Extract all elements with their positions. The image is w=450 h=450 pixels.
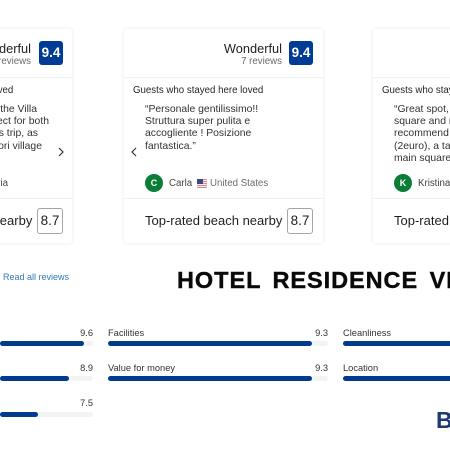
label: Cleanliness <box>343 328 391 338</box>
rating badge: 9.4 <box>292 45 310 60</box>
reviewer avatar <box>145 174 163 192</box>
reviewer avatar <box>394 174 412 192</box>
reviewer avatar: K <box>400 178 406 188</box>
panel: centre review card <box>124 29 323 243</box>
review quote <box>0 104 49 152</box>
score row: facilities <box>108 328 328 346</box>
next arrow <box>58 148 64 156</box>
panel: left review card <box>0 29 72 243</box>
bar <box>0 376 93 381</box>
review quote: accogliente ! Posizione <box>145 128 251 139</box>
score row: staff <box>0 328 93 346</box>
previous arrow <box>131 148 136 156</box>
panel: right review card <box>373 29 450 243</box>
review quote: “Personale gentilissimo!! <box>145 104 258 115</box>
beach score: 8.7 <box>291 213 309 228</box>
bar <box>343 376 450 381</box>
review quote: fantastica.” <box>145 141 196 152</box>
score row: location <box>343 363 450 381</box>
read all reviews link: Read all reviews <box>3 272 69 282</box>
bar <box>0 412 93 417</box>
beach nearby label: Top-rated beach nearby <box>145 213 282 228</box>
value: 7.5 <box>80 398 93 408</box>
icon: US flag <box>197 179 207 188</box>
label: Location <box>343 363 378 373</box>
guests heading: Guests who stayed here loved <box>133 85 263 96</box>
review quote: main square <box>394 153 450 164</box>
value: 9.3 <box>315 328 328 338</box>
reviewer avatar: C <box>151 178 157 188</box>
label: Value for money <box>108 363 175 373</box>
beach score <box>37 208 63 234</box>
value: 9.6 <box>80 328 93 338</box>
value: 8.9 <box>80 363 93 373</box>
score row: free wifi <box>0 398 93 417</box>
value: 9.3 <box>315 363 328 373</box>
review count: 7 reviews <box>241 56 282 67</box>
review quote <box>145 104 258 152</box>
reviewer country: United States <box>210 178 268 189</box>
rating badge <box>39 41 63 65</box>
reviewer name: Kristina <box>418 178 450 189</box>
review quote: Struttura super pulita e <box>145 116 250 127</box>
rating word: Wonderful <box>224 41 282 56</box>
bar <box>108 341 328 346</box>
beach score: 8.7 <box>41 213 59 228</box>
score row: value for money <box>108 363 328 381</box>
label: Facilities <box>108 328 144 338</box>
rating badge: 9.4 <box>42 45 60 60</box>
review quote <box>394 104 450 164</box>
reviewer name: Carla <box>169 178 192 189</box>
score row: cleanliness <box>343 328 450 346</box>
bar <box>0 341 93 346</box>
bar <box>343 341 450 346</box>
score row: comfort <box>0 363 93 381</box>
beach score <box>287 208 313 234</box>
bar <box>108 376 328 381</box>
rating badge <box>289 41 313 65</box>
